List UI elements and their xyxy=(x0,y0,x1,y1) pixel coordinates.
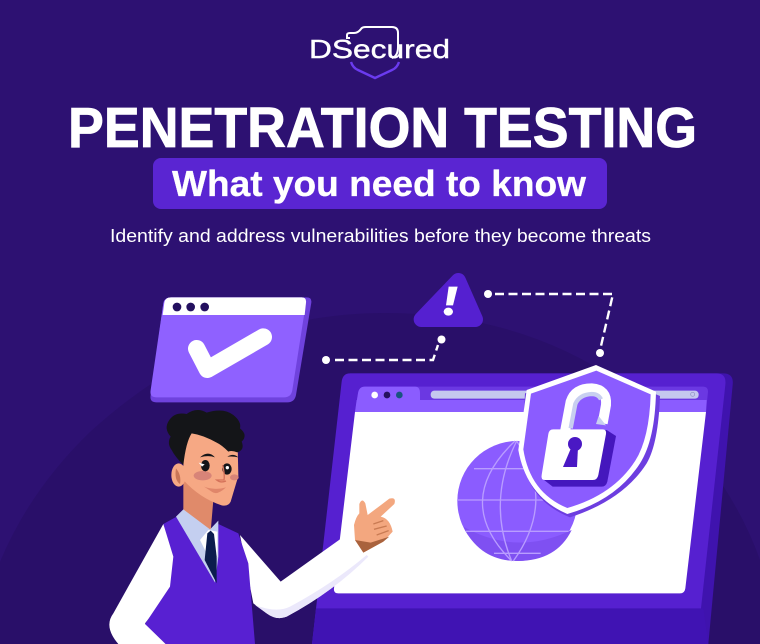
tie xyxy=(205,531,217,583)
icon: checkmark window xyxy=(150,297,311,402)
icon: shield with padlock xyxy=(518,365,660,517)
icon: warning triangle xyxy=(421,281,475,319)
tagline: Identify and address vulnerabilities before they become threats xyxy=(110,226,651,246)
character: presenter xyxy=(109,410,395,644)
panel: browser monitor xyxy=(312,365,733,644)
arrow: dashed connector left xyxy=(322,336,446,364)
padlock body xyxy=(542,430,616,487)
subtitle pill: What you need to know xyxy=(172,163,587,204)
pointing hand xyxy=(354,498,395,553)
hair xyxy=(167,410,245,465)
right shirt sleeve xyxy=(240,533,368,618)
face details xyxy=(194,454,239,493)
neck xyxy=(183,475,213,532)
title: PENETRATION TESTING xyxy=(68,96,697,160)
ear xyxy=(171,463,186,487)
left shirt sleeve xyxy=(109,524,174,644)
collar xyxy=(176,509,218,583)
logo xyxy=(309,27,450,78)
face xyxy=(183,427,238,506)
arrow: dashed connector right xyxy=(484,290,613,357)
logo: DSecured xyxy=(309,34,450,64)
browser screen xyxy=(334,412,706,593)
padlock shackle xyxy=(565,388,606,432)
browser toolbar xyxy=(355,387,708,412)
keyhole xyxy=(563,437,582,467)
vest xyxy=(145,517,255,644)
icon: globe xyxy=(457,441,577,561)
